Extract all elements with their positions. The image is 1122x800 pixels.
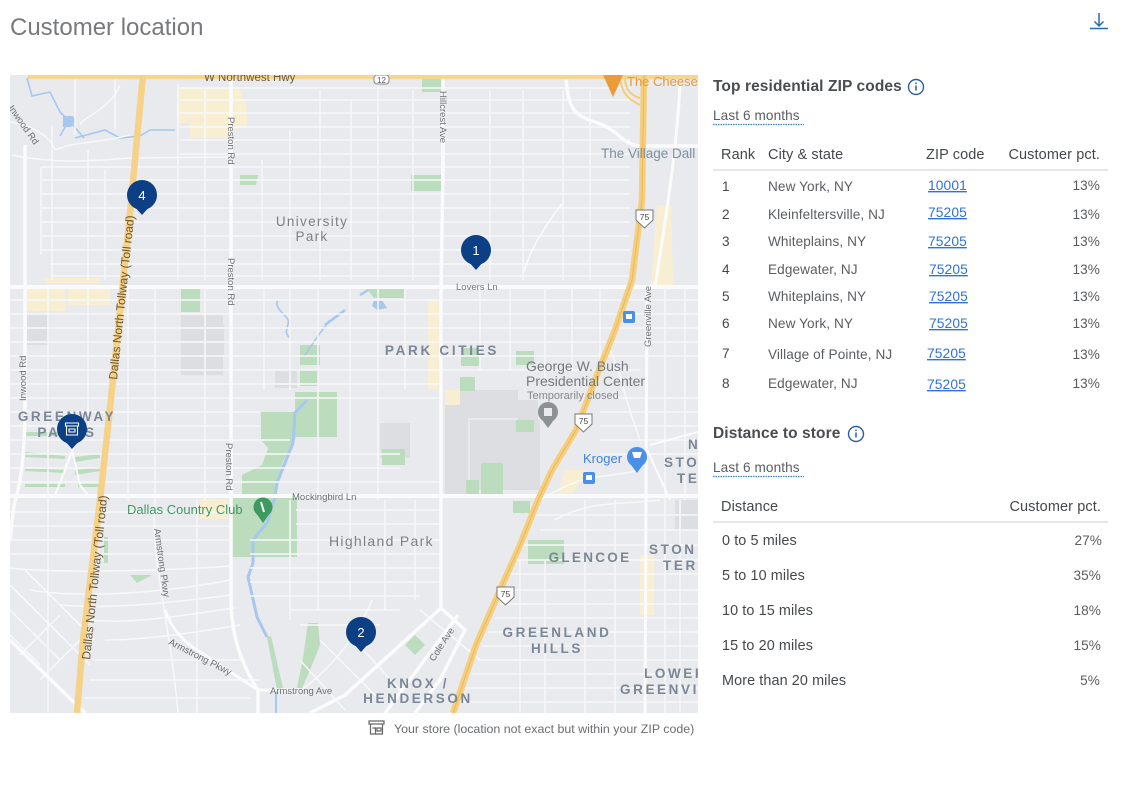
map labels: Inwood Rd	[18, 356, 29, 401]
table rows: 8	[722, 376, 730, 391]
map POI icons and highway shields: 12	[377, 76, 386, 85]
map labels: Presidential Center	[526, 373, 645, 389]
table header: Customer pct.	[1009, 499, 1101, 515]
table header	[713, 499, 1108, 522]
map labels: STON	[649, 542, 697, 557]
map POI icons and highway shields: 75	[640, 212, 649, 222]
table rows: Whiteplains, NY	[768, 234, 866, 249]
table rows: 5%	[1080, 673, 1100, 688]
table rows: 75205	[929, 289, 968, 304]
map labels: Dallas North Tollway (Toll road)	[79, 495, 110, 660]
map labels: Temporarily closed	[527, 390, 619, 402]
map labels: The Cheese	[627, 74, 698, 89]
map labels: Dallas Country Club	[127, 502, 243, 517]
marker: 4: 4	[138, 188, 146, 203]
period selector: Last 6 months	[713, 460, 800, 475]
icon: download	[1090, 13, 1108, 28]
table rows: New York, NY	[768, 179, 853, 194]
map labels: George W. Bush	[526, 358, 629, 374]
campus and parcel blocks	[27, 313, 698, 530]
table rows: Kleinfeltersville, NJ	[768, 207, 885, 222]
table rows: 13%	[1072, 376, 1100, 391]
table rows: 75205	[928, 205, 967, 220]
marker: 1	[461, 235, 491, 270]
map labels: Dallas North Tollway (Toll road)	[106, 215, 137, 380]
map labels: Greenville Ave	[643, 286, 654, 347]
table rows: 1	[722, 179, 730, 194]
icon: info	[908, 80, 924, 94]
map labels: HENDERSON	[363, 691, 473, 706]
table rows	[722, 178, 1100, 392]
table rows: Edgewater, NJ	[768, 376, 858, 391]
panel: distance to store	[713, 425, 1108, 689]
map labels: GREENVI	[620, 682, 699, 697]
roads: tollways	[28, 75, 698, 713]
period selector: Last 6 months	[713, 108, 800, 123]
table rows: Village of Pointe, NJ	[768, 347, 892, 362]
table header: Rank	[721, 147, 756, 163]
table header: Distance	[721, 499, 778, 515]
minor streets	[10, 79, 698, 713]
table rows: 13%	[1072, 289, 1100, 304]
map labels: Preston Rd	[225, 258, 236, 306]
table header	[713, 147, 1108, 170]
map labels: Preston Rd	[223, 443, 234, 491]
table rows: 18%	[1073, 603, 1101, 618]
map labels: TERI	[663, 558, 704, 573]
table rows: 13%	[1072, 207, 1100, 222]
table rows: 4	[722, 262, 730, 277]
map POI icons and highway shields	[254, 75, 653, 605]
map labels: PARKS	[37, 425, 97, 440]
table rows: 5 to 10 miles	[722, 568, 805, 584]
marker: store	[57, 414, 87, 449]
major streets	[10, 75, 698, 713]
table rows: 27%	[1074, 533, 1102, 548]
table rows: Whiteplains, NY	[768, 289, 866, 304]
map labels: GLENCOE	[549, 550, 631, 565]
parks	[25, 78, 564, 690]
map labels: Lovers Ln	[456, 282, 498, 293]
table rows: 3	[722, 234, 730, 249]
table rows: More than 20 miles	[722, 673, 846, 689]
map labels: Highland Park	[329, 533, 434, 549]
table rows: 75205	[929, 316, 968, 331]
icon: info	[848, 426, 864, 442]
map labels: Mockingbird Ln	[292, 492, 356, 503]
map labels: STO	[664, 455, 699, 470]
table header: City & state	[768, 147, 843, 163]
map labels: Armstrong Pkwy	[167, 637, 233, 678]
panel: top residential ZIP codes	[713, 78, 1108, 392]
table rows: 13%	[1072, 262, 1100, 277]
map labels: Preston Rd	[225, 117, 236, 165]
title: Customer location	[10, 14, 203, 41]
table rows: 15%	[1073, 638, 1101, 653]
map labels: HILLS	[531, 641, 583, 656]
table rows: 13%	[1072, 316, 1100, 331]
marker: 4	[127, 180, 157, 215]
table rows: 2	[722, 207, 730, 222]
map labels: Armstrong Ave	[270, 686, 332, 697]
table header: Customer pct.	[1008, 147, 1100, 163]
map labels: TE	[677, 471, 699, 486]
map labels: Park	[296, 229, 328, 244]
map labels: The Village Dall	[601, 146, 695, 161]
map legend: Your store (location not exact but within your ZIP code)	[394, 722, 694, 736]
table rows: 75205	[928, 234, 967, 249]
map labels: KNOX /	[387, 676, 449, 691]
map POI icons and highway shields: 75	[501, 589, 510, 599]
table rows	[722, 533, 1102, 689]
map POI icons and highway shields: 75	[579, 416, 588, 426]
table rows: New York, NY	[768, 316, 853, 331]
map labels: GREENLAND	[503, 625, 611, 640]
table rows: 13%	[1072, 178, 1100, 193]
map labels: LOWER	[644, 666, 707, 681]
heading: Top residential ZIP codes	[713, 78, 902, 95]
marker: 1: 1	[472, 243, 480, 258]
map labels	[6, 72, 707, 706]
map labels: N	[688, 437, 700, 452]
table rows: 75205	[927, 377, 966, 392]
table rows: 75205	[929, 262, 968, 277]
table rows: 13%	[1072, 347, 1100, 362]
table rows: 0 to 5 miles	[722, 533, 797, 549]
map labels: Armstrong Pkwy	[151, 528, 172, 598]
table rows: 7	[722, 346, 730, 361]
panel: map	[6, 72, 707, 713]
table rows: 10001	[928, 178, 967, 193]
map labels: Inwood Rd	[6, 103, 41, 147]
table rows: 6	[722, 316, 730, 331]
map labels: W Northwest Hwy	[204, 72, 296, 84]
marker: 2	[346, 617, 376, 652]
table rows: 75205	[927, 346, 966, 361]
map labels: Hillcrest Ave	[437, 91, 448, 143]
table rows: 35%	[1073, 568, 1101, 583]
table rows: 5	[722, 289, 730, 304]
table header: ZIP code	[926, 147, 985, 163]
water	[27, 78, 368, 713]
yellow commercial areas	[27, 87, 673, 615]
map labels: PARK CITIES	[385, 343, 499, 358]
table rows: 13%	[1072, 234, 1100, 249]
table rows: 15 to 20 miles	[722, 638, 813, 654]
heading: Distance to store	[713, 425, 841, 442]
map labels: GREENWAY	[18, 409, 116, 424]
map labels: Kroger	[583, 451, 623, 466]
map labels: Cole Ave	[427, 626, 457, 664]
table rows: Edgewater, NJ	[768, 262, 858, 277]
table rows: 10 to 15 miles	[722, 603, 813, 619]
marker: 2: 2	[357, 625, 365, 640]
map labels: University	[276, 214, 348, 229]
